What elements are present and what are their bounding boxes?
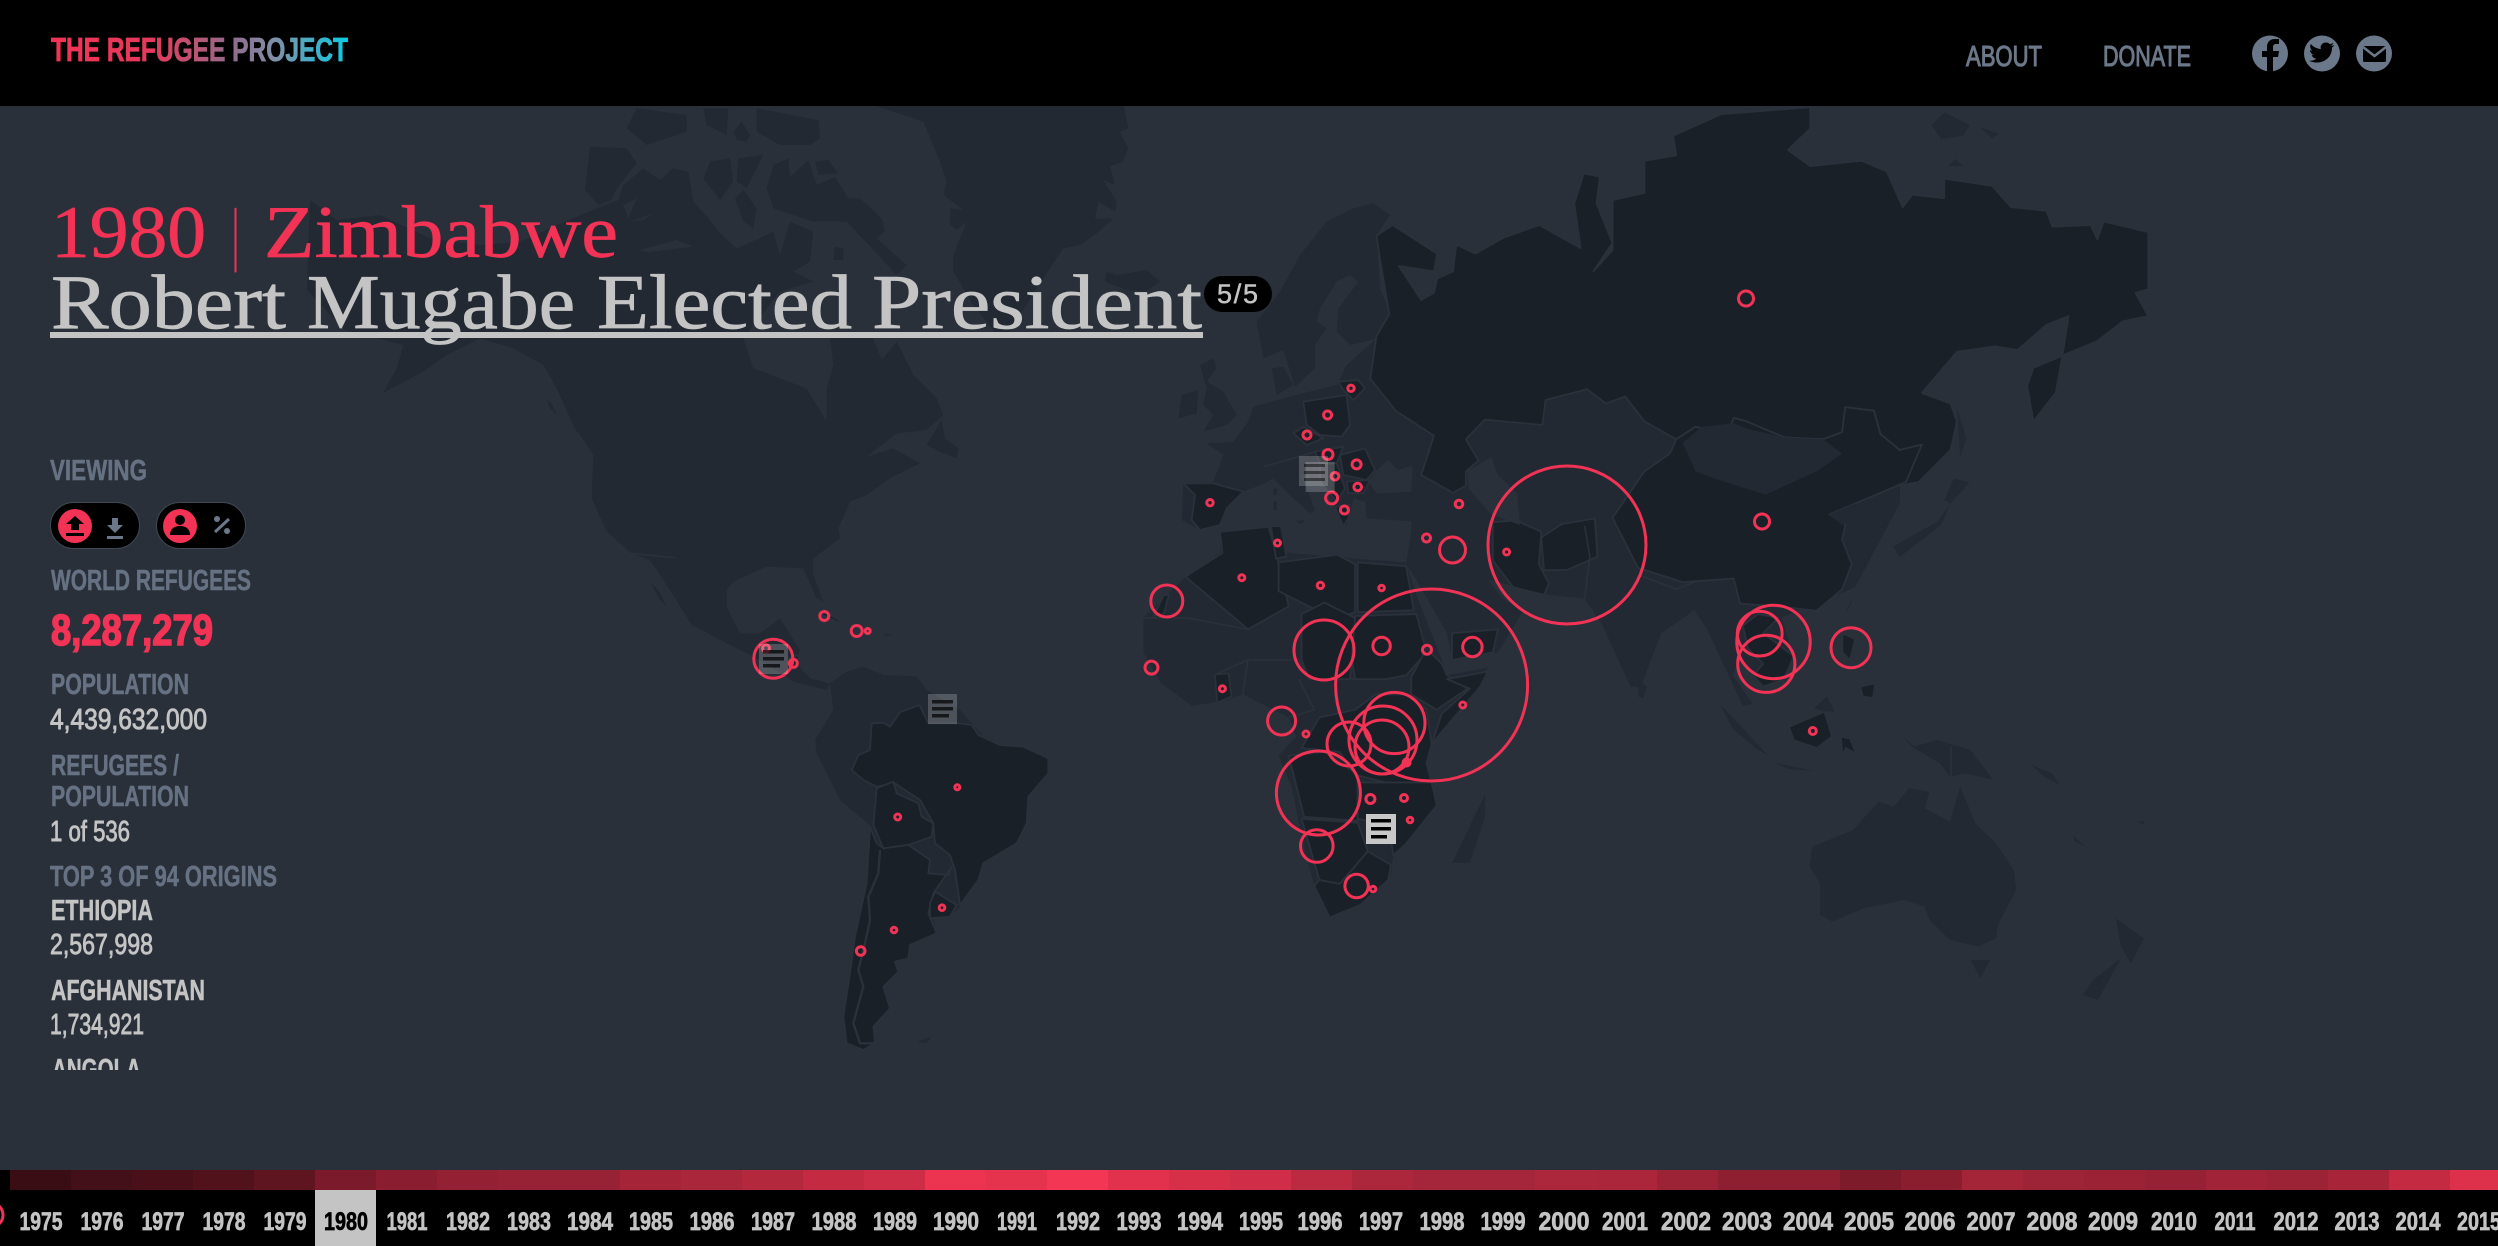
origin: Ethiopia: 2,567,998 <box>50 929 153 961</box>
timeline <box>0 1170 2498 1246</box>
timeline year labels: 1990 <box>933 1208 979 1236</box>
timeline year labels: 1978 <box>202 1208 246 1236</box>
story counter badge: 5/5 <box>1217 279 1258 309</box>
origin: Afghanistan <box>51 980 204 1038</box>
nav: donate: DONATE <box>2103 41 2191 73</box>
label: top origins: TOP 3 OF 94 ORIGINS <box>50 861 277 893</box>
logo: THE REFUGEE PROJECT <box>51 31 348 68</box>
timeline year labels: 1989 <box>873 1208 917 1236</box>
timeline year labels: 2001 <box>1602 1208 1648 1236</box>
label: viewing: VIEWING <box>50 455 147 487</box>
title: story headline: Mugabe <box>307 259 575 345</box>
origin: Angola (clipped): ANGOLA <box>52 1054 141 1086</box>
timeline year labels: 2008 <box>2026 1208 2078 1236</box>
timeline year labels: 2009 <box>2088 1208 2138 1236</box>
timeline year labels: 2006 <box>1904 1208 1956 1236</box>
header bar <box>0 0 2498 106</box>
title: year and country: Zimbabwe <box>264 192 618 274</box>
icon: mail <box>2356 36 2392 72</box>
origin: Ethiopia: ETHIOPIA <box>51 895 153 927</box>
title: year and country: | <box>232 196 239 273</box>
timeline year labels: 1976 <box>80 1208 124 1236</box>
timeline year labels: 1984 <box>567 1208 613 1236</box>
origin: Afghanistan: AFGHANISTAN <box>51 975 205 1007</box>
timeline year labels: 1998 <box>1420 1208 1465 1236</box>
timeline year labels: 1986 <box>690 1208 734 1236</box>
timeline year labels: 1985 <box>629 1208 673 1236</box>
timeline year labels: 1981 <box>386 1208 428 1236</box>
story marker: South America <box>928 694 957 724</box>
timeline year labels: 1988 <box>812 1208 857 1236</box>
origin: Ethiopia <box>50 900 153 958</box>
timeline year labels: 2014 <box>2396 1208 2441 1236</box>
timeline year labels: 1995 <box>1239 1208 1283 1236</box>
timeline year labels: 1975 <box>20 1208 63 1236</box>
title: year and country <box>51 192 618 274</box>
timeline year labels: 1980 <box>324 1208 368 1236</box>
timeline year labels: 1997 <box>1359 1208 1403 1236</box>
side panel: statistics <box>50 455 277 1086</box>
timeline year labels <box>20 1208 2498 1236</box>
timeline year labels: 2010 <box>2151 1208 2197 1236</box>
timeline year labels: 2003 <box>1722 1208 1772 1236</box>
story markers: Europe <box>1299 456 1335 492</box>
value: population: 4,439,632,000 <box>50 704 207 736</box>
timeline year labels: 1993 <box>1116 1208 1162 1236</box>
label: refugees / population: REFUGEES / <box>51 750 179 782</box>
story counter badge <box>1204 276 1272 312</box>
title: story headline: Elected <box>597 259 852 345</box>
title: story headline: President <box>872 259 1202 345</box>
value: refugees per population: 1 of 536 <box>50 816 130 848</box>
label: population: POPULATION <box>51 669 189 701</box>
label: world refugees: WORLD REFUGEES <box>51 565 251 597</box>
timeline year labels: 1994 <box>1177 1208 1223 1236</box>
origin: Afghanistan: 1,734,921 <box>50 1009 144 1041</box>
timeline year labels: 2000 <box>1538 1208 1590 1236</box>
timeline year labels: 2005 <box>1844 1208 1894 1236</box>
toggle: people/percent <box>156 502 246 548</box>
label: refugees / population: POPULATION <box>51 781 189 813</box>
timeline year labels: 1991 <box>997 1208 1037 1236</box>
timeline scrubber handle <box>0 1203 3 1227</box>
refugee circles <box>754 291 1871 955</box>
icon: facebook <box>2252 36 2288 72</box>
nav: about: ABOUT <box>1966 41 2042 73</box>
timeline year labels: 2012 <box>2274 1208 2318 1236</box>
timeline year labels: 2011 <box>2214 1208 2256 1236</box>
timeline year labels: 1983 <box>507 1208 551 1236</box>
timeline year labels: 2013 <box>2334 1208 2380 1236</box>
selected year highlight <box>315 1190 376 1246</box>
timeline year labels: 1996 <box>1298 1208 1342 1236</box>
title: story headline: Robert <box>51 259 286 345</box>
timeline year labels: 1982 <box>446 1208 490 1236</box>
timeline year labels: 2007 <box>1966 1208 2016 1236</box>
label: refugees / population <box>52 754 188 806</box>
timeline year labels: 1979 <box>264 1208 306 1236</box>
active story marker: Zimbabwe <box>1366 814 1396 844</box>
value: world refugees: 8,287,279 <box>51 606 213 655</box>
icon: twitter <box>2304 36 2340 72</box>
timeline year labels: 1987 <box>751 1208 795 1236</box>
timeline heat bars <box>10 1170 2498 1190</box>
timeline year labels: 1992 <box>1056 1208 1100 1236</box>
toggle: departures/arrivals <box>50 502 140 548</box>
timeline year labels: 2004 <box>1783 1208 1833 1236</box>
timeline year labels: 2002 <box>1661 1208 1711 1236</box>
timeline year labels: 1999 <box>1480 1208 1526 1236</box>
title: year and country: 1980 <box>51 192 206 274</box>
timeline year labels: 1977 <box>142 1208 184 1236</box>
story marker: Central America <box>759 644 788 674</box>
world map <box>307 105 2148 1050</box>
title: story headline <box>50 259 1203 345</box>
